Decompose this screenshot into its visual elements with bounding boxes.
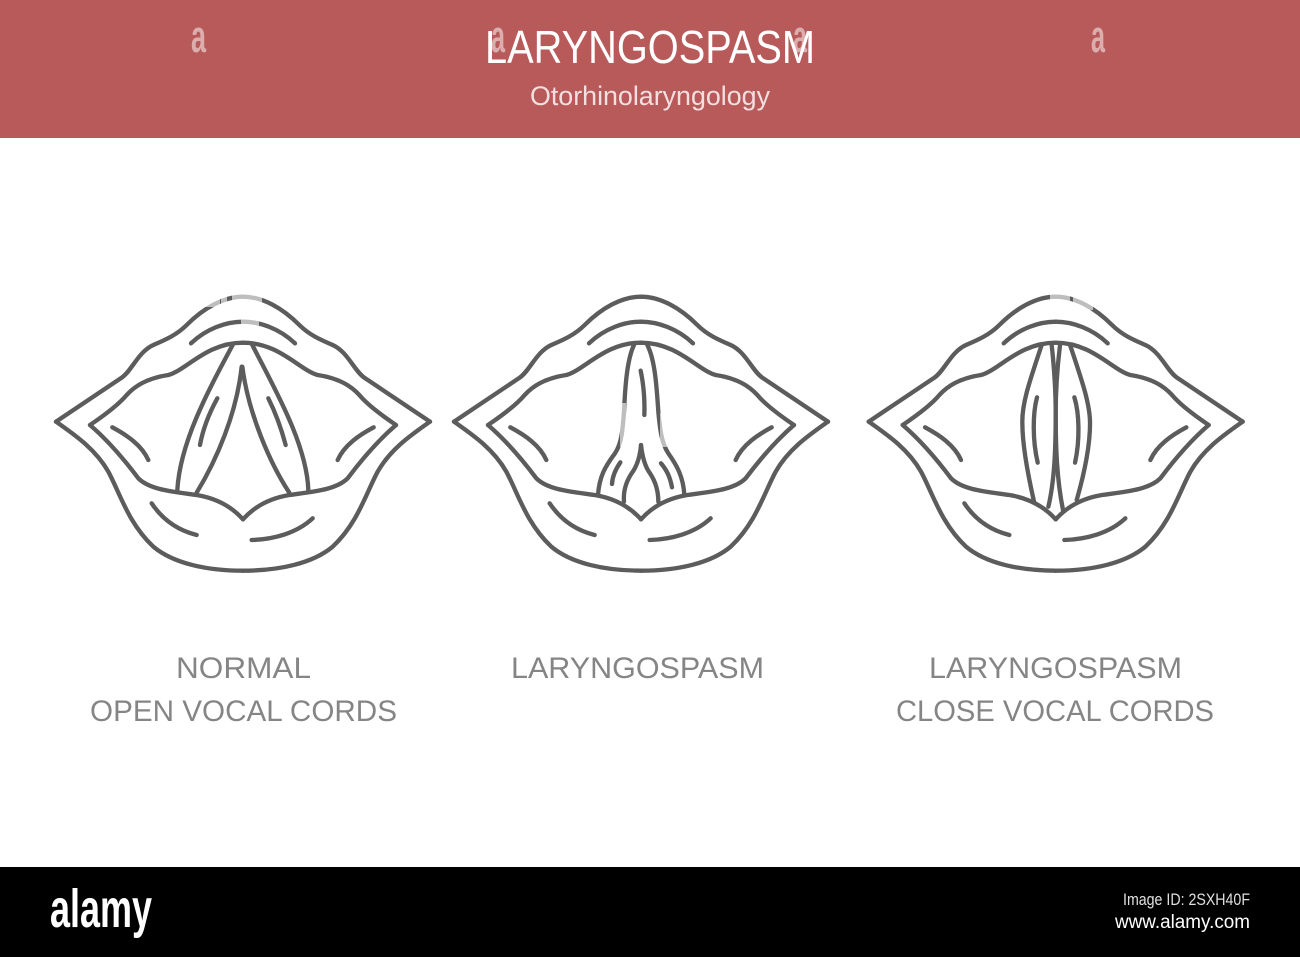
caption: normal: NORMAL xyxy=(176,652,311,685)
watermark letters in header: a xyxy=(191,11,207,62)
logo: alamy xyxy=(50,879,152,939)
website: www.alamy.com xyxy=(1114,912,1250,933)
caption: normal: OPEN VOCAL CORDS xyxy=(90,695,397,728)
caption: laryngospasm close vocal cords: CLOSE VOCAL CORDS xyxy=(896,695,1214,728)
caption: laryngospasm close vocal cords xyxy=(896,652,1214,728)
image id: Image ID: 2SXH40F xyxy=(1123,890,1250,909)
diagram: laryngospasm xyxy=(454,297,828,571)
caption: normal xyxy=(90,652,397,728)
caption: laryngospasm: LARYNGOSPASM xyxy=(511,652,764,685)
watermark letters in header xyxy=(191,11,1106,62)
header banner xyxy=(0,0,1300,138)
title: LARYNGOSPASM xyxy=(485,21,815,73)
subtitle: Otorhinolaryngology xyxy=(530,81,770,111)
watermark letters in header: a xyxy=(1091,11,1106,62)
watermark letters in header: a xyxy=(793,11,808,62)
diagram: laryngospasm close vocal cords xyxy=(869,297,1243,571)
watermark letters in header: a xyxy=(491,11,506,62)
caption: laryngospasm close vocal cords: LARYNGOSPASM xyxy=(929,652,1182,685)
diagram: normal open vocal cords xyxy=(56,297,430,571)
faint watermark patches over the drawings xyxy=(200,293,1093,447)
footer band xyxy=(0,867,1300,957)
